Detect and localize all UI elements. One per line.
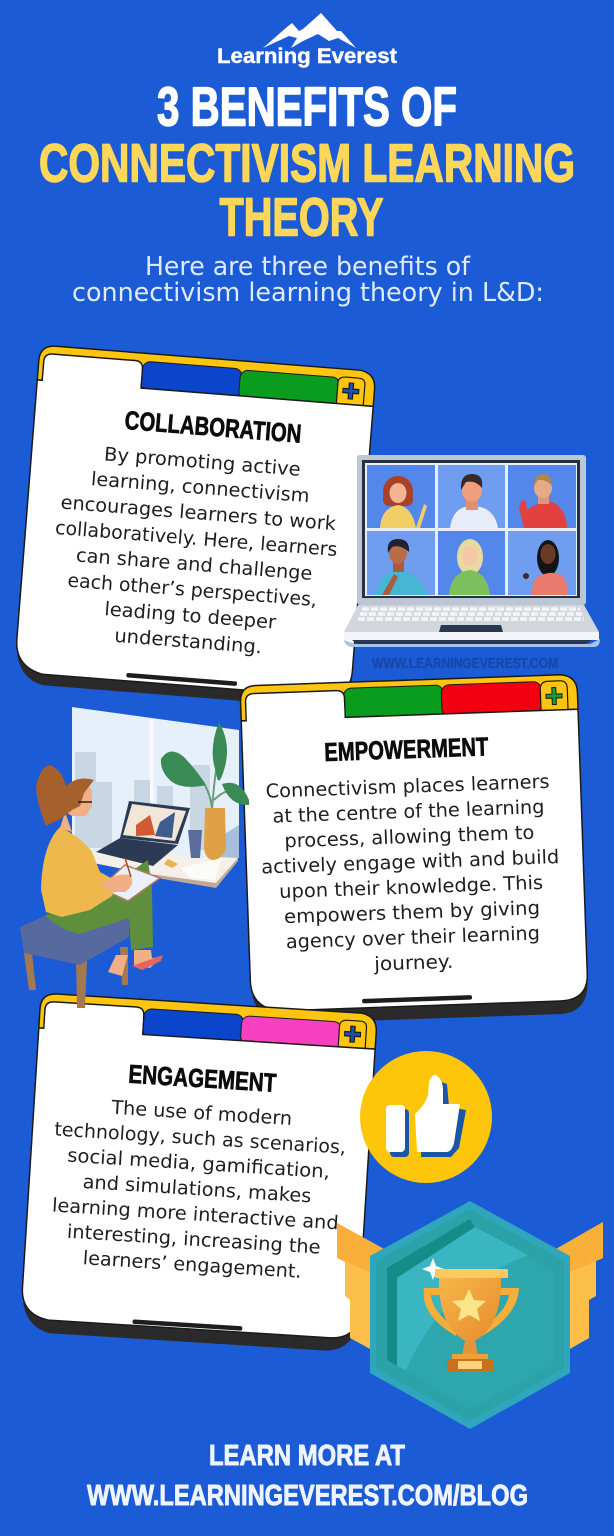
torso [41,827,118,917]
text block: empowerment: process, allowing them to [284,822,535,852]
vase [204,808,226,860]
hair [36,765,94,826]
footer call to action [87,1440,528,1512]
subtitle: Here are three benefits of [145,252,471,282]
stool [20,915,129,1008]
subtitle: connectivism learning theory in L&D: [72,278,544,308]
heading: engagement: ENGAGEMENT [128,1059,277,1098]
text block: empowerment: agency over their learning [286,922,540,953]
video tile 1 [367,465,435,528]
panel: collaboration card [13,345,376,709]
title [39,76,575,248]
head [60,812,72,832]
text block: collaboration: By promoting active [103,443,301,481]
icon: trophy badge [337,1201,603,1429]
papers [180,858,222,880]
text block: collaboration: leading to deeper [104,598,277,634]
laptop on desk [96,801,190,866]
text block: collaboration: understanding. [114,625,263,658]
text block: empowerment: actively engage with and build [261,846,560,878]
title: THEORY [220,188,384,248]
text block: engagement: interesting, increasing the [66,1221,321,1259]
logo wordmark: Learning Everest [217,45,397,68]
heading: empowerment: EMPOWERMENT [324,731,489,767]
text block: empowerment: at the centre of the learning [272,796,545,828]
hand [100,874,132,892]
notebook [100,865,160,901]
bottom handle [132,1319,242,1331]
legs [45,860,153,950]
logo: Learning Everest [217,13,397,68]
text block: empowerment: Connectivism places learners [265,771,550,803]
heading: collaboration: COLLABORATION [124,405,303,449]
text block: empowerment [258,771,563,979]
text block: empowerment: journey. [373,951,454,976]
video tile 3 [508,465,576,528]
right wing [556,1222,603,1350]
hexagon [370,1201,570,1429]
text block: collaboration: learning, connectivism [90,468,310,507]
desk [88,850,238,887]
text block: empowerment: upon their knowledge. This [279,872,543,903]
text block: collaboration [46,440,344,664]
title: 3 BENEFITS OF [157,76,457,138]
text block: engagement: learning more interactive and [51,1194,339,1234]
text block: collaboration: each other’s perspectives, [67,570,318,611]
footer call to action: WWW.LEARNINGEVEREST.COM/BLOG [87,1480,528,1512]
cup [188,830,202,858]
glasses [78,801,92,803]
text block: engagement [46,1093,348,1285]
window [72,707,239,858]
text block: engagement: technology, such as scenarios, [54,1118,347,1159]
text block: collaboration: can share and challenge [75,544,313,585]
text block: collaboration: encourages learners to work [60,492,337,535]
thumb hand [386,1105,405,1152]
text block: engagement: and simulations, makes [82,1171,312,1207]
text block: engagement: The use of modern [110,1097,293,1130]
video tile 6 [508,531,576,595]
video tile 2 [438,465,505,528]
sparkle [422,1258,444,1280]
bottom handle [126,673,237,686]
icon: mountains [263,13,356,48]
icon: thumbs up [360,1051,492,1183]
footer call to action: LEARN MORE AT [209,1440,405,1472]
panel: engagement card [20,993,377,1352]
illustration: woman studying at a window desk [20,707,249,1008]
text block: engagement: social media, gamification, [67,1145,331,1183]
video tile 5 [438,531,505,595]
bottom handle [362,995,472,1003]
video tile 4 [367,531,435,595]
illustration: laptop video call [344,455,600,647]
watermark: WWW.LEARNINGEVEREST.COM [372,655,558,672]
subtitle [72,252,544,308]
text block: collaboration: collaboratively. Here, learners [54,517,338,561]
trophy [424,1269,519,1371]
left wing [337,1223,384,1350]
panel: empowerment card [240,674,589,1025]
laptop base [344,605,599,632]
text block: empowerment: empowers them by giving [284,897,540,928]
text block: engagement: learners’ engagement. [82,1247,302,1283]
plant [161,722,249,810]
